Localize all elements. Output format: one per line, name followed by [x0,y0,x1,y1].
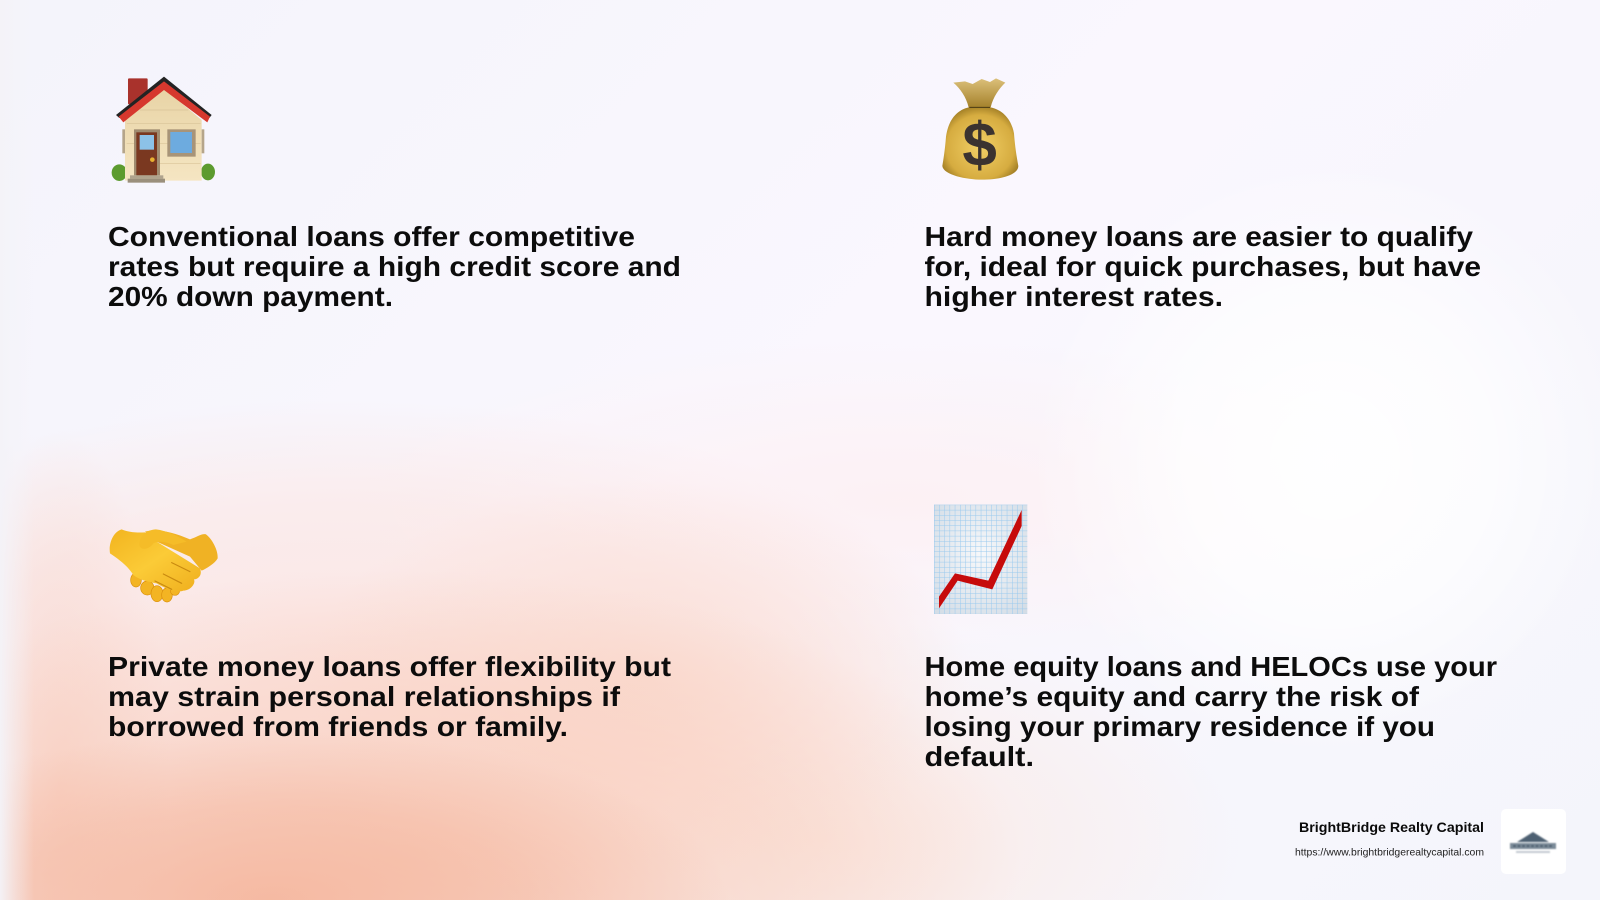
text: conventional loans: Conventional loans offer competitive [108,221,635,252]
money bag neck [953,78,1005,107]
house roof [116,77,212,122]
logo card [1501,809,1566,874]
footer url: https://www.brightbridgerealtycapital.com [1295,848,1484,858]
handshake finger creases [155,563,190,589]
text: home equity loans [924,651,1497,772]
text: private money loans [108,651,671,742]
handshake lower fingers [131,573,180,602]
chart grid [934,505,1027,614]
chart paper [934,505,1027,614]
text: conventional loans [108,221,681,312]
icon: rising chart [934,505,1027,614]
handshake left hand [110,529,201,591]
house door [134,129,160,175]
text: home equity loans: losing your primary residence if you [924,711,1435,742]
icon: house [112,77,215,183]
money bag body [942,107,1018,180]
text: home equity loans: Home equity loans and HELOCs use your [924,651,1497,682]
house siding [127,110,201,163]
handshake thumb [139,529,187,549]
text: conventional loans: rates but require a high credit score and [108,251,681,282]
text: hard money loans: higher interest rates. [924,281,1223,312]
text: home equity loans: default. [924,741,1034,772]
handshake right arm [145,530,218,571]
chart red line [939,510,1022,608]
text: hard money loans: Hard money loans are easier to qualify [924,221,1473,252]
icon: money bag [942,78,1018,180]
house chimney [128,78,148,104]
text: private money loans: Private money loans offer flexibility but [108,651,671,682]
text: home equity loans: home’s equity and carry the risk of [924,681,1420,712]
text: private money loans: may strain personal relationships if [108,681,621,712]
text: hard money loans: for, ideal for quick purchases, but have [924,251,1481,282]
text: private money loans: borrowed from friends or family. [108,711,568,742]
house bushes [112,164,215,181]
house window [167,129,196,157]
house walls [125,88,202,181]
dollar sign: $ [962,111,997,180]
text: hard money loans [924,221,1481,312]
money bag tie [969,106,990,109]
house side shutters [122,129,204,153]
icon: handshake [110,529,218,602]
logo mark [1510,832,1556,853]
text: conventional loans: 20% down payment. [108,281,393,312]
footer brand name: BrightBridge Realty Capital [1299,819,1484,835]
house steps [128,175,165,183]
